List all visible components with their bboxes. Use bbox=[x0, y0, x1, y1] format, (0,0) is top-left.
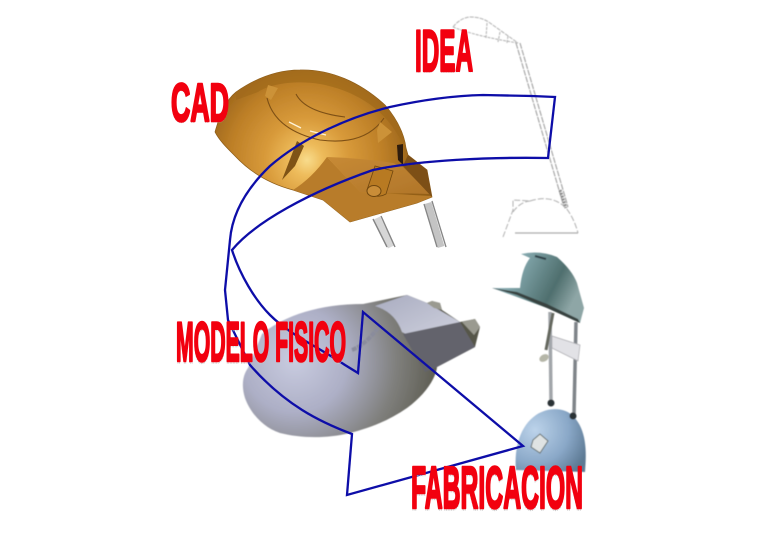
heading: FABRICACION bbox=[411, 455, 583, 523]
heading: CAD bbox=[171, 73, 229, 134]
arrow: process flow outline bbox=[225, 95, 555, 495]
lamp poles bbox=[538, 312, 580, 414]
dome bbox=[215, 70, 432, 222]
dome top dark band bbox=[236, 70, 406, 148]
lamp base bbox=[516, 409, 586, 472]
lamp shade bbox=[492, 253, 584, 323]
block details bbox=[267, 94, 384, 141]
process diagram: MODELO FISICO bbox=[176, 310, 346, 373]
icon: lamp concept sketch bbox=[453, 17, 578, 237]
icon: finished lamp bbox=[492, 253, 586, 472]
process diagram: CAD bbox=[171, 73, 229, 133]
support rods bbox=[373, 201, 446, 247]
mounting block bbox=[293, 157, 432, 222]
icon: physical model bbox=[243, 295, 480, 437]
process diagram: CAD bbox=[171, 74, 229, 134]
process diagram: MODELO FISICO bbox=[176, 312, 346, 375]
icon: CAD lamp shade model bbox=[215, 70, 446, 247]
heading: IDEA bbox=[415, 19, 473, 85]
connector box bbox=[375, 295, 460, 337]
heading: MODELO FISICO bbox=[176, 310, 346, 375]
process diagram: IDEA bbox=[415, 20, 473, 85]
process diagram: IDEA bbox=[415, 19, 473, 84]
